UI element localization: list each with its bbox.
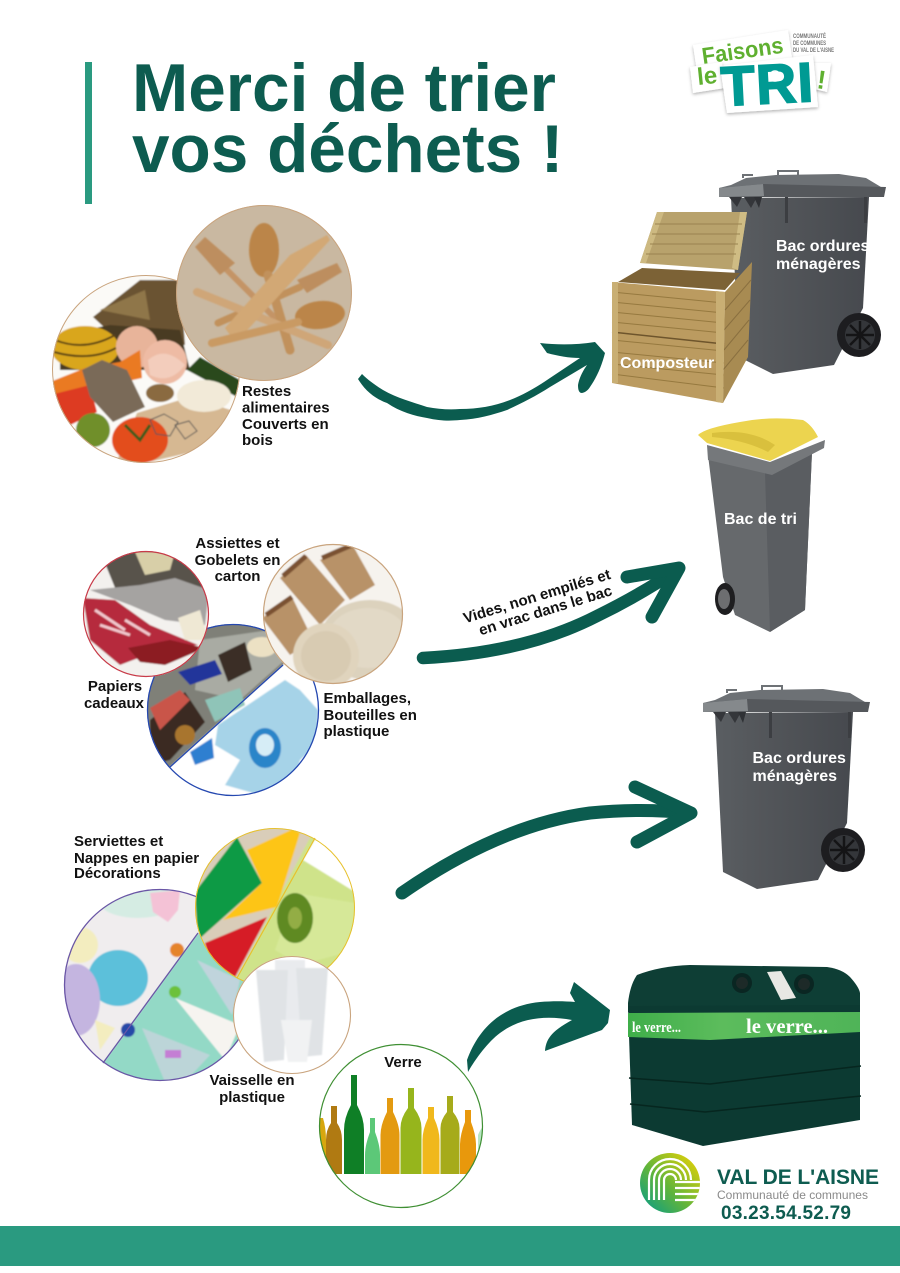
photo circle: couverts en bois	[176, 205, 352, 381]
phone number: 03.23.54.52.79	[721, 1203, 851, 1224]
logo: Faisons le TRI: le	[696, 62, 719, 91]
arrow: vers bac de tri	[423, 568, 679, 658]
arrow: vers bac ordures ménagères	[402, 787, 691, 893]
bac ordures ménagères (bas)	[703, 686, 870, 889]
composter lid	[640, 212, 747, 270]
label: vides, non empilés: Vides, non empilés et	[461, 566, 613, 627]
logo: Faisons le TRI	[690, 30, 834, 118]
label: restes alimentaires: Restes	[242, 383, 291, 400]
logo: Faisons le TRI: TRI	[719, 50, 815, 118]
label: papiers cadeaux: Papiers	[88, 678, 142, 695]
label: restes alimentaires: bois	[242, 432, 273, 449]
arrow: vers conteneur à verre	[467, 982, 610, 1072]
label: serviettes, nappes, décorations: Nappes en papier	[74, 850, 199, 867]
photo circle: verre	[316, 1044, 490, 1208]
footer band	[0, 1226, 900, 1266]
logo: Faisons le TRI: Faisons	[700, 32, 785, 69]
label: emballages: Bouteilles en	[324, 707, 417, 724]
label: bac de tri: Bac de tri	[724, 511, 797, 528]
photo circle: décorations	[64, 888, 244, 1082]
arrow: vers composteur	[358, 342, 605, 421]
photo circle: assiettes et gobelets	[262, 544, 404, 684]
label: bac ordures: ménagères	[776, 256, 861, 273]
logo: Faisons le TRI: COMMUNAUTÉ	[793, 32, 826, 40]
label: vaisselle en plastique: Vaisselle en	[209, 1072, 295, 1089]
label: emballages: Emballages,	[324, 690, 411, 707]
bac ordures ménagères (haut)	[719, 171, 886, 374]
label: serviettes, nappes, décorations: Décorations	[74, 865, 161, 882]
label: bac ordures: Bac ordures	[776, 238, 869, 255]
photo circle: emballages plastiques	[147, 623, 319, 797]
label: composteur: Composteur	[620, 355, 714, 372]
photo circle: restes alimentaires	[50, 273, 242, 470]
label: bac ordures: ménagères	[752, 768, 837, 785]
label: papiers cadeaux: cadeaux	[84, 695, 145, 712]
label: assiettes et gobelets: Gobelets en	[195, 552, 280, 569]
label: bac ordures: Bac ordures	[752, 750, 846, 767]
bac de tri	[698, 418, 825, 632]
label: assiettes et gobelets: Assiettes et	[195, 535, 280, 552]
photo circle: papiers cadeaux	[83, 551, 210, 678]
label: restes alimentaires: Couverts en	[242, 416, 329, 433]
label: emballages: plastique	[324, 723, 389, 740]
logo: Faisons le TRI: !	[815, 64, 828, 95]
label: verre: Verre	[384, 1054, 422, 1071]
wheel	[715, 583, 735, 615]
label: assiettes et gobelets: carton	[215, 568, 260, 585]
photo circle: vaisselle en plastique	[233, 956, 353, 1076]
label: vaisselle en plastique: plastique	[219, 1089, 285, 1106]
photo circle: serviettes et nappes	[195, 828, 360, 989]
logo: Val de l'Aisne: Communauté de communes	[717, 1188, 868, 1202]
label: restes alimentaires: alimentaires	[242, 400, 330, 416]
title: vos déchets !	[132, 112, 563, 187]
composteur	[612, 212, 752, 403]
label: serviettes, nappes, décorations: Serviettes et	[74, 833, 163, 850]
logo: Val de l'Aisne	[640, 1153, 879, 1213]
logo: Faisons le TRI: DU VAL DE L'AISNE	[793, 48, 834, 54]
conteneur à verre	[628, 965, 861, 1146]
conteneur à verre: le verre...	[632, 1020, 681, 1036]
logo: Faisons le TRI: DE COMMUNES	[793, 41, 826, 47]
title accent bar	[85, 62, 92, 204]
text: le verre: le verre...	[746, 1014, 828, 1038]
title: Merci de trier	[132, 51, 556, 126]
label: vides, non empilés: en vrac dans le bac	[477, 582, 614, 639]
logo: Val de l'Aisne: VAL DE L'AISNE	[717, 1166, 879, 1189]
